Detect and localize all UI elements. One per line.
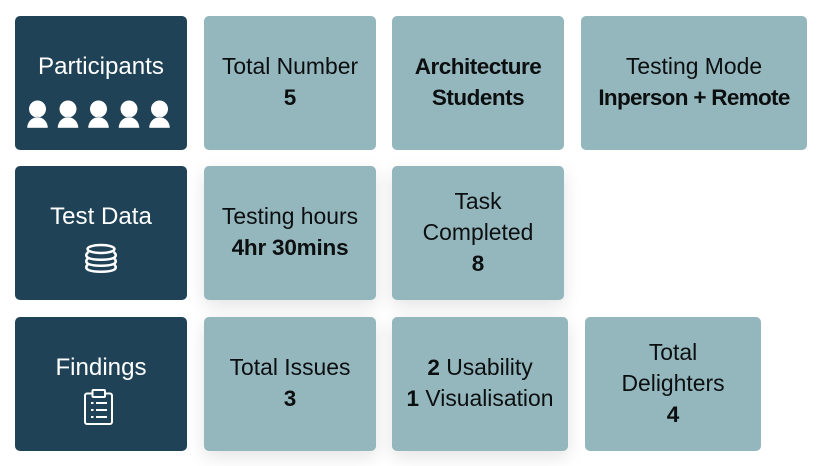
text: testing mode bbox=[598, 53, 790, 110]
panel: total number bbox=[204, 16, 376, 150]
panel: testing mode bbox=[581, 16, 807, 150]
text: task completed: 8 bbox=[472, 251, 484, 276]
icon: database stack bbox=[85, 244, 117, 273]
heading: test data: Test Data bbox=[50, 203, 152, 230]
text: issue breakdown bbox=[406, 354, 553, 411]
text: testing hours: 4hr 30mins bbox=[232, 235, 348, 260]
heading: participants: Participants bbox=[38, 53, 164, 80]
text: architecture students: Architecture bbox=[415, 54, 541, 79]
panel: usability and visualisation bbox=[392, 317, 568, 451]
text: architecture students bbox=[415, 54, 541, 110]
text: testing hours bbox=[222, 203, 358, 260]
panel: task completed bbox=[392, 166, 564, 300]
text: total number 5: Total Number bbox=[222, 53, 358, 79]
text: total delighters: Total bbox=[649, 339, 697, 365]
text: architecture students: Students bbox=[432, 85, 524, 110]
heading: findings: Findings bbox=[55, 354, 147, 381]
text: total delighters bbox=[621, 339, 725, 427]
text: total number 5: 5 bbox=[284, 85, 296, 110]
text: testing mode: Inperson + Remote bbox=[598, 85, 790, 110]
icon: five people bbox=[27, 100, 170, 128]
text: total issues bbox=[230, 354, 350, 411]
text: task completed bbox=[423, 188, 533, 276]
text: total issues: 3 bbox=[284, 386, 296, 411]
panel: architecture students bbox=[392, 16, 564, 150]
text: total delighters: Delighters bbox=[621, 370, 725, 396]
text: issue breakdown: 2 Usability bbox=[427, 354, 533, 380]
panel: test data header bbox=[15, 166, 187, 300]
text: total delighters: 4 bbox=[667, 402, 679, 427]
text: task completed: Task bbox=[454, 188, 502, 214]
icon: clipboard bbox=[84, 389, 113, 425]
text: total number 5 bbox=[222, 53, 358, 110]
text: total issues: Total Issues bbox=[230, 354, 350, 380]
text: task completed: Completed bbox=[423, 219, 533, 245]
panel: participants header bbox=[15, 16, 187, 150]
text: issue breakdown: 1 Visualisation bbox=[406, 385, 553, 411]
panel: testing hours bbox=[204, 166, 376, 300]
text: testing hours: Testing hours bbox=[222, 203, 358, 229]
panel: total delighters bbox=[585, 317, 761, 451]
text: testing mode: Testing Mode bbox=[626, 53, 762, 79]
panel: total issues bbox=[204, 317, 376, 451]
panel: findings header bbox=[15, 317, 187, 451]
